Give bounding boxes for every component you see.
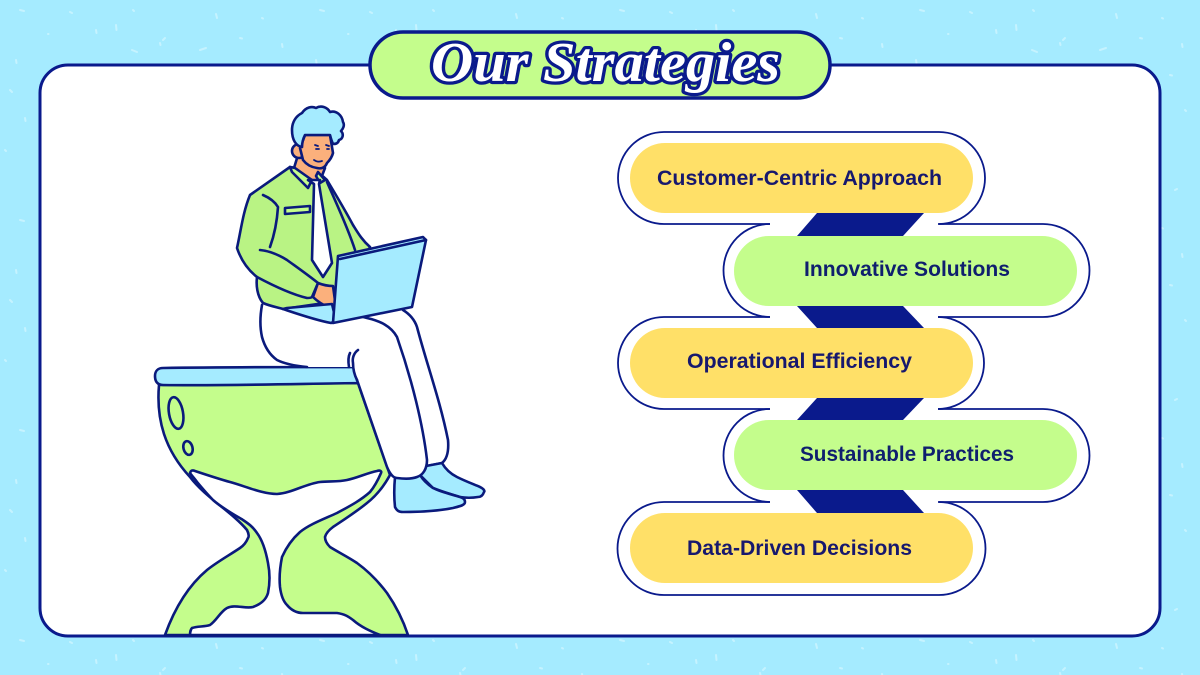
- hourglass cap: [155, 367, 362, 385]
- title banner: [370, 32, 830, 98]
- step 5: Data-Driven Decisions: [618, 502, 986, 595]
- hourglass sand gap: [190, 470, 381, 635]
- step 4: Sustainable Practices: [724, 409, 1090, 502]
- connector 3: [797, 398, 924, 420]
- face: [300, 135, 333, 168]
- hair: [292, 107, 344, 147]
- near shoe: [394, 475, 465, 512]
- hand: [313, 283, 336, 308]
- ear: [292, 144, 306, 158]
- shirt body: [237, 167, 370, 309]
- step 4: Sustainable Practices: Sustainable Practices: [800, 442, 1014, 466]
- collar: [290, 167, 325, 188]
- step 3: Operational Efficiency: Operational Efficiency: [687, 349, 912, 373]
- hourglass: [155, 364, 419, 635]
- white card panel: [40, 65, 1160, 636]
- connector 2: [797, 306, 924, 328]
- step 1: Customer-Centric Approach: Customer-Centric Approach: [657, 166, 942, 190]
- laptop base: [283, 304, 336, 323]
- step 5: Data-Driven Decisions: Data-Driven Decisions: [687, 536, 912, 560]
- connector 4: [797, 490, 924, 513]
- laptop edge: [340, 240, 426, 259]
- trouser creases: [348, 350, 358, 380]
- eyes and mouth: [314, 145, 329, 162]
- hourglass bubble small: [182, 440, 194, 456]
- far leg: [390, 310, 448, 466]
- tie: [308, 180, 332, 277]
- step 2: Innovative Solutions: [724, 224, 1090, 317]
- title: Our Strategies: [431, 32, 780, 94]
- illustration: person on hourglass: [155, 107, 484, 635]
- hourglass bubble large: [166, 396, 186, 430]
- connector 1: [797, 213, 924, 236]
- trousers: [260, 300, 427, 479]
- step 1: Customer-Centric Approach: [618, 132, 985, 224]
- laptop screen: [333, 237, 426, 323]
- far shoe: [420, 463, 484, 498]
- jacket seam lines: [257, 182, 355, 298]
- neck: [294, 155, 325, 181]
- step 3: Operational Efficiency: [618, 317, 984, 409]
- hourglass cap right: [405, 364, 419, 380]
- step 2: Innovative Solutions: Innovative Solutions: [804, 257, 1010, 281]
- shirt pocket: [285, 206, 310, 214]
- strategy flow: [618, 132, 1090, 595]
